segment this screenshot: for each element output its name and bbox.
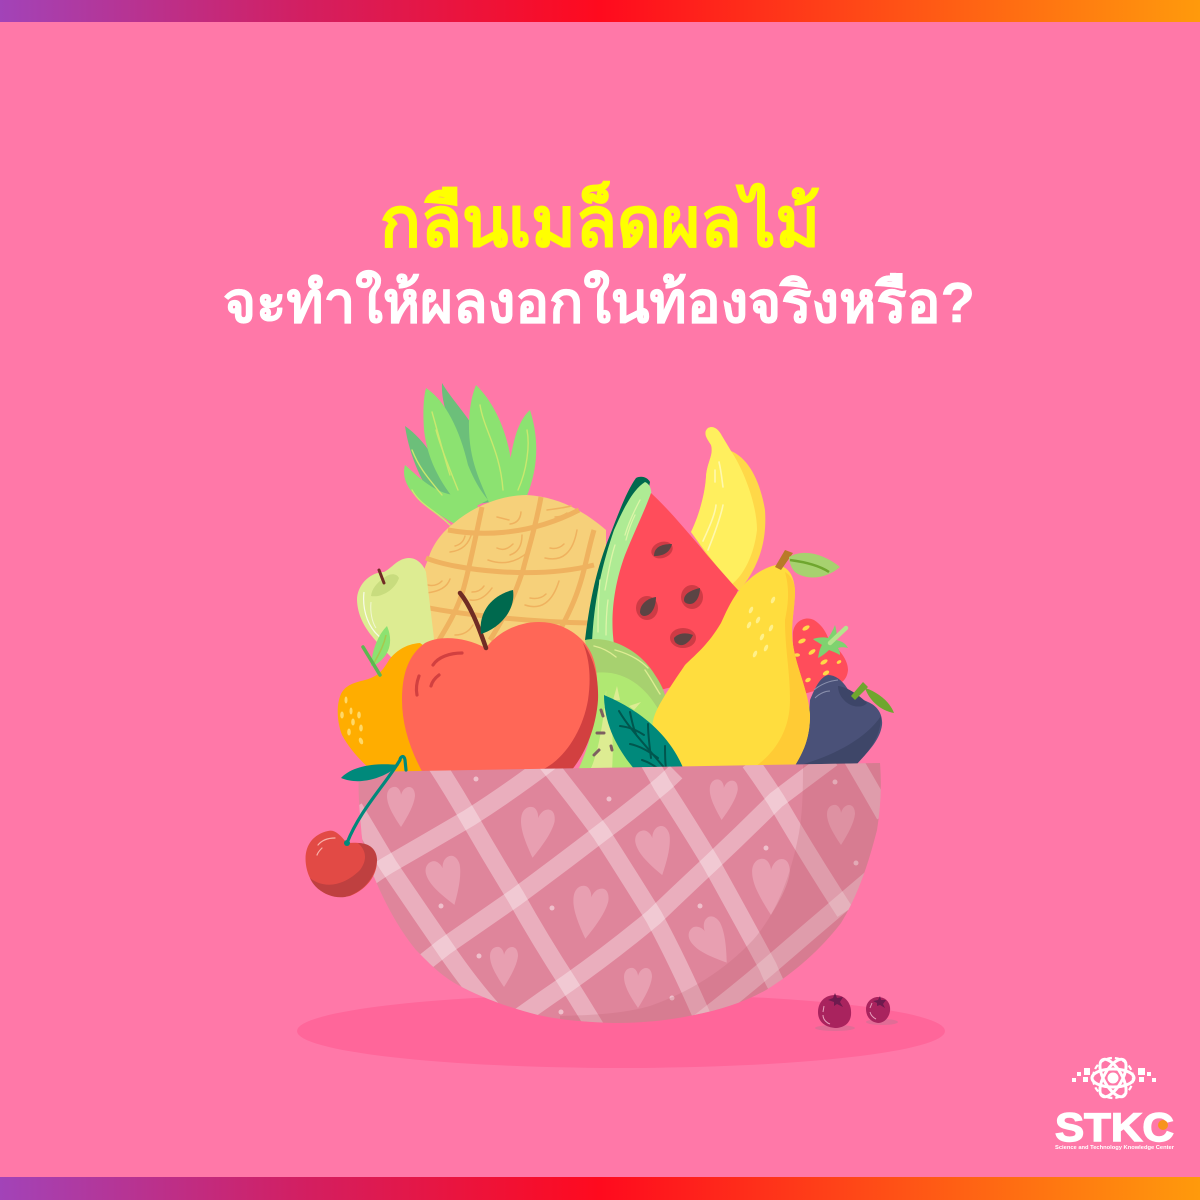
title — [223, 181, 975, 335]
dots — [438, 776, 858, 1014]
heading line 2: จะทำให้ผลงอกในท้องจริงหรือ? — [223, 269, 975, 335]
banana — [691, 427, 765, 590]
red apple — [402, 590, 598, 775]
bowl — [358, 763, 881, 1023]
blueberries — [815, 993, 898, 1031]
bowl shading — [560, 763, 880, 1023]
icon: atom — [1072, 1055, 1156, 1101]
plum — [794, 675, 894, 767]
orange — [338, 626, 430, 775]
pineapple — [404, 383, 606, 660]
pear — [652, 550, 840, 770]
orange dot — [1158, 1120, 1168, 1130]
wordmark: STKC — [1055, 1106, 1174, 1150]
watermelon slice — [585, 477, 738, 690]
top gradient bar — [0, 0, 1200, 22]
fruit bowl illustration — [306, 383, 900, 1035]
kiwi — [578, 639, 668, 770]
tagline: Science and Technology Knowledge Center — [1055, 1145, 1175, 1151]
plaid bands — [352, 755, 885, 1035]
heading line 1: กลืนเมล็ดผลไม้ — [380, 181, 820, 261]
ground shadow — [297, 994, 945, 1068]
STKC logo — [1055, 1055, 1175, 1151]
cherry — [306, 757, 406, 897]
bottom gradient bar — [0, 1177, 1200, 1200]
hearts — [387, 779, 855, 1008]
icon: green apple — [357, 558, 436, 657]
strawberry — [793, 618, 848, 695]
leaf — [604, 695, 684, 770]
